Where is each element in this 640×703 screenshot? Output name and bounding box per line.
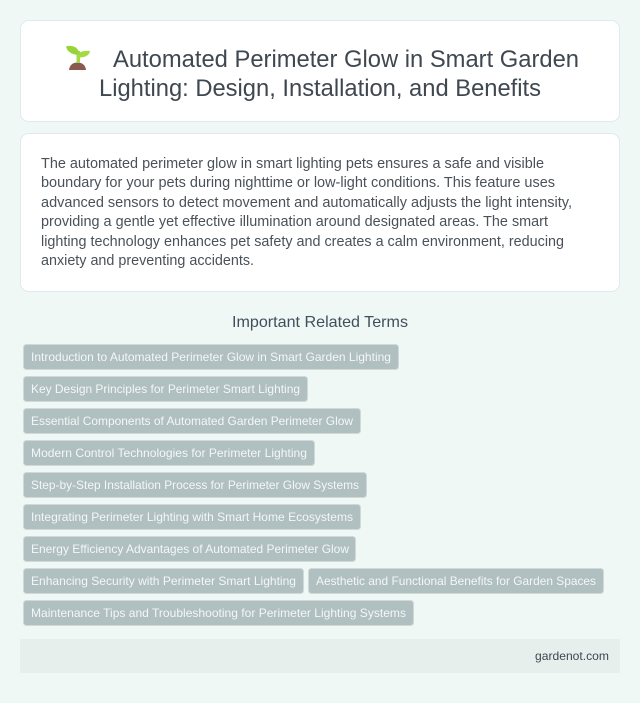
panel: title card xyxy=(20,20,620,122)
tag: Key Design Principles for Perimeter Smart Lighting xyxy=(31,382,300,396)
tag: Introduction to Automated Perimeter Glow in Smart Garden Lighting xyxy=(31,350,391,364)
footer xyxy=(20,639,620,673)
title: Automated Perimeter Glow in Smart Garden xyxy=(113,46,579,73)
tag xyxy=(24,536,356,562)
text block: description: advanced sensors to detect movement and automatically adjusts the light intensity, xyxy=(41,194,572,211)
tag xyxy=(24,568,304,594)
text block: description: anxiety and preventing accidents. xyxy=(41,252,254,269)
text block: description xyxy=(41,155,572,269)
tag: Aesthetic and Functional Benefits for Garden Spaces xyxy=(316,574,596,588)
tag: Modern Control Technologies for Perimeter Lighting xyxy=(31,446,307,460)
tag: Energy Efficiency Advantages of Automated Perimeter Glow xyxy=(31,542,349,556)
title: Lighting: Design, Installation, and Benefits xyxy=(99,75,541,102)
tag: Essential Components of Automated Garden Perimeter Glow xyxy=(31,414,353,428)
text block: description: The automated perimeter glow in smart lighting pets ensures a safe and visible xyxy=(41,155,544,172)
tag xyxy=(24,344,398,370)
tag: Step-by-Step Installation Process for Perimeter Glow Systems xyxy=(31,478,359,492)
title xyxy=(99,46,579,102)
tag xyxy=(24,472,366,498)
tag xyxy=(24,440,314,466)
text block: description: providing a gentle yet effective illumination around designated areas. The smart xyxy=(41,213,549,230)
panel: description xyxy=(20,134,620,292)
tag xyxy=(24,504,360,530)
tag: Integrating Perimeter Lighting with Smart Home Ecosystems xyxy=(31,510,353,524)
tag list xyxy=(24,344,604,626)
footer: gardenot.com xyxy=(535,649,609,663)
icon: seedling xyxy=(66,46,90,70)
tag xyxy=(24,600,414,626)
text block: description: boundary for your pets during nighttime or low-light conditions. This feature uses xyxy=(41,174,555,191)
tag xyxy=(24,408,360,434)
heading: important related terms: Important Related Terms xyxy=(232,314,408,331)
tag xyxy=(24,376,308,402)
tag xyxy=(308,568,604,594)
tag: Enhancing Security with Perimeter Smart Lighting xyxy=(31,574,296,588)
text block: description: lighting technology enhances pet safety and creates a calm environment, reducing xyxy=(41,233,564,250)
tag: Maintenance Tips and Troubleshooting for Perimeter Lighting Systems xyxy=(31,606,406,620)
